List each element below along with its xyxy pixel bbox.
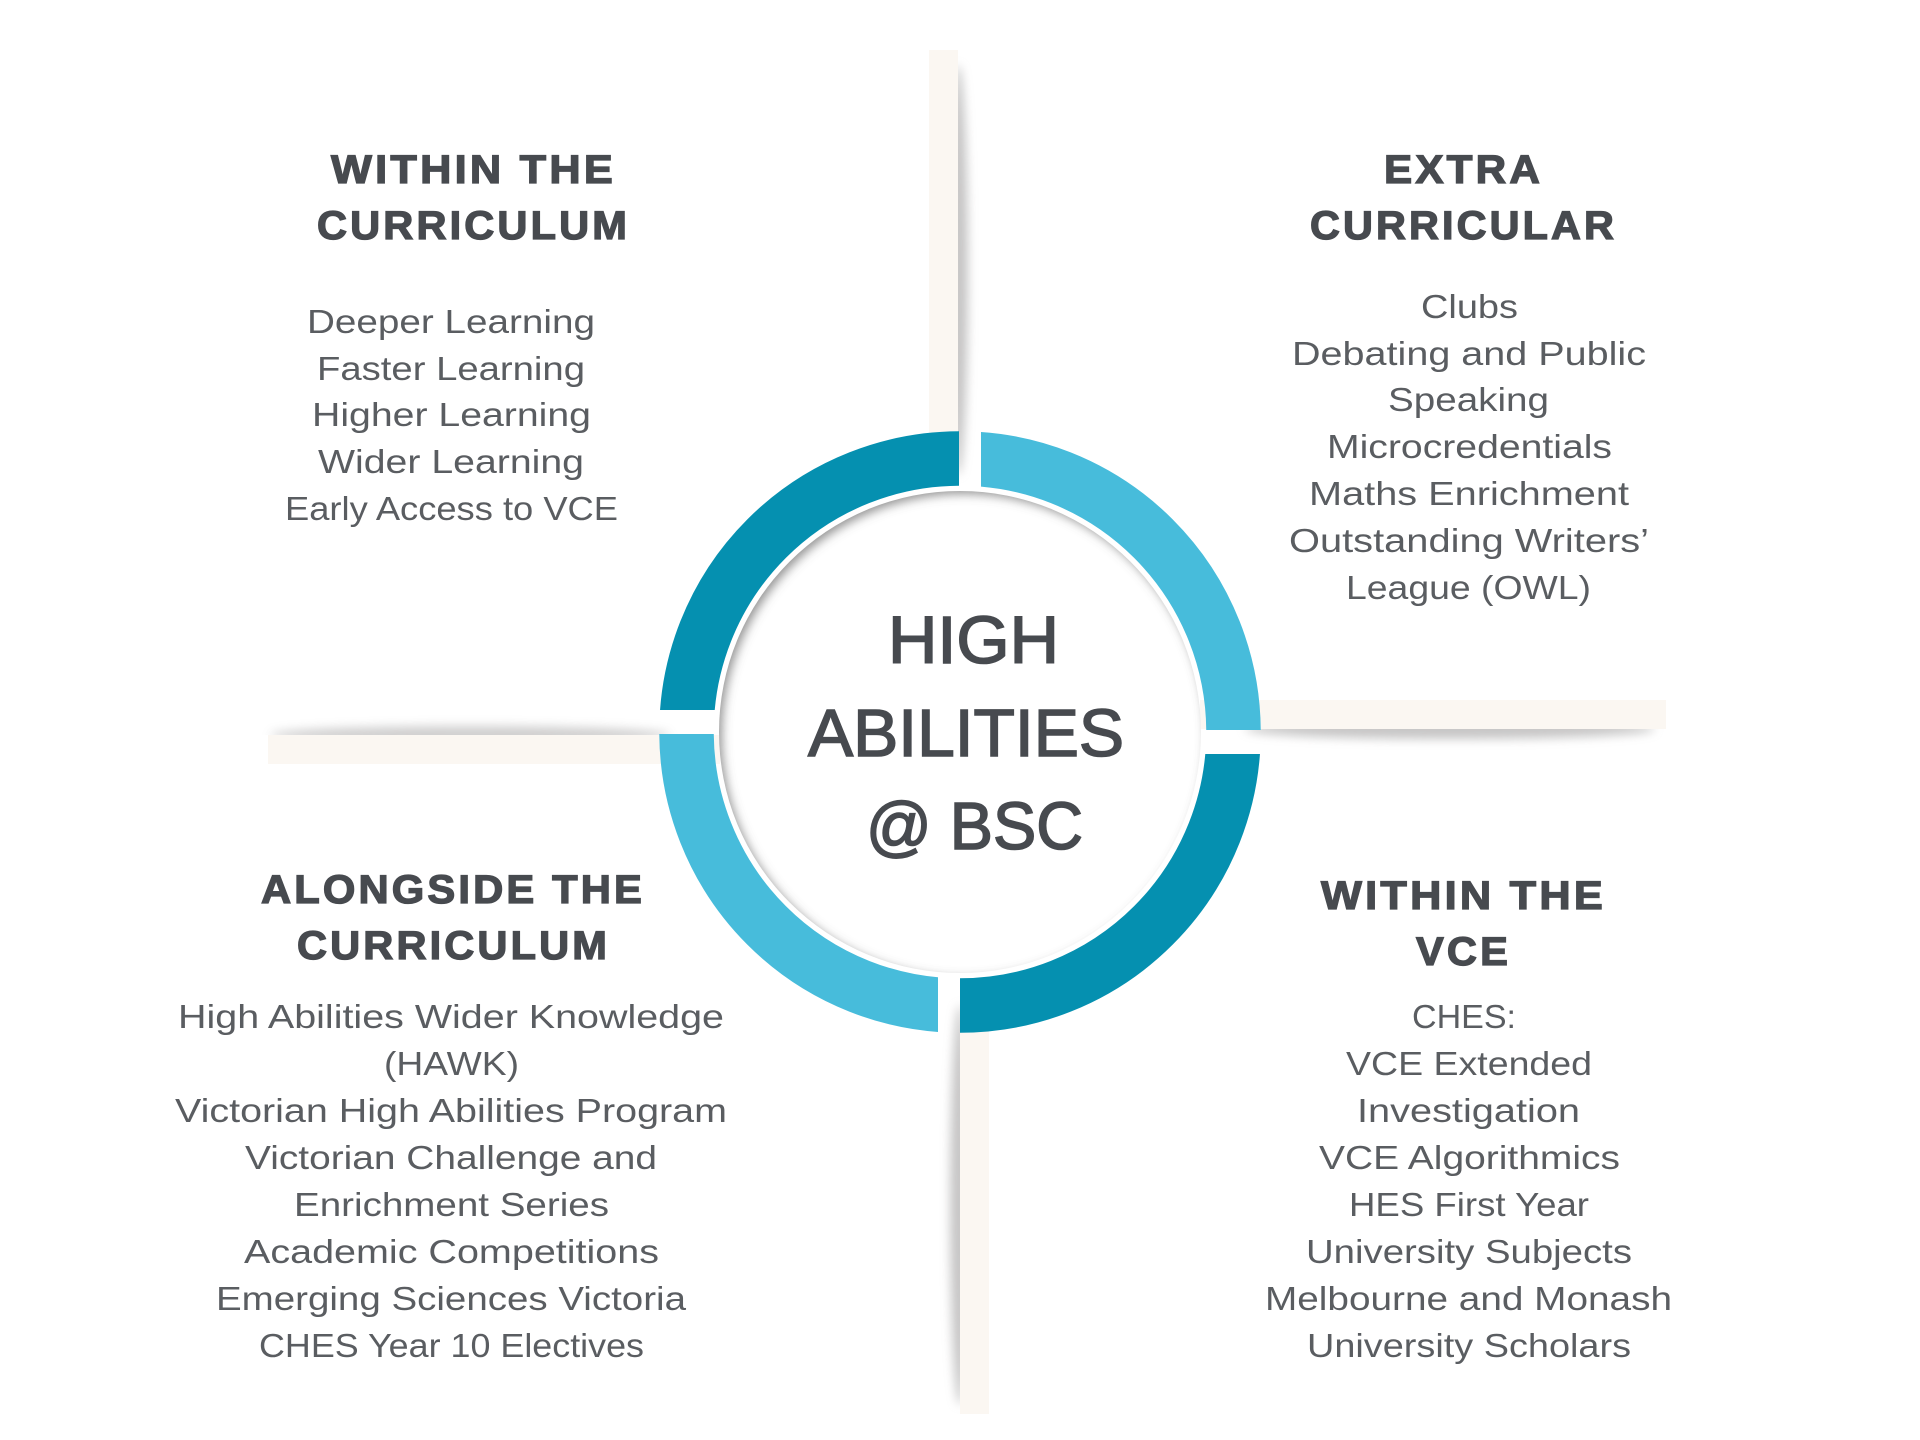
list: alongside the curriculum: Academic Competitions (244, 1233, 659, 1270)
list: within the vce (1265, 998, 1672, 1364)
centre title: ABILITIES (808, 696, 1124, 771)
list: within the curriculum: Faster Learning (317, 350, 585, 387)
list: within the vce: VCE Extended (1346, 1045, 1592, 1082)
centre title (808, 603, 1124, 864)
heading: within the curriculum: CURRICULUM (317, 204, 630, 248)
list: extra curricular: Speaking (1388, 381, 1549, 418)
list: alongside the curriculum (175, 998, 727, 1364)
heading: within the vce: WITHIN THE (1321, 874, 1606, 918)
right bar with shadow (1200, 700, 1666, 739)
heading: alongside the curriculum: ALONGSIDE THE (261, 868, 645, 912)
list: within the vce: University Scholars (1307, 1327, 1631, 1364)
ring segment: bottom right (960, 754, 1260, 1033)
heading: alongside the curriculum: CURRICULUM (297, 924, 610, 968)
list: within the vce: HES First Year (1349, 1186, 1589, 1223)
list: extra curricular: Maths Enrichment (1309, 475, 1629, 512)
heading: within the vce (1321, 874, 1606, 974)
panel: alongside the curriculum (175, 868, 727, 1364)
ring segment: top right (981, 432, 1261, 730)
list: within the curriculum: Higher Learning (312, 396, 591, 433)
ring segment: top left (660, 431, 959, 710)
list: alongside the curriculum: Victorian Challenge and (245, 1139, 657, 1176)
left bar with shadow (268, 726, 720, 764)
list: alongside the curriculum: Emerging Sciences Victoria (216, 1280, 687, 1317)
panel: within the vce (1265, 874, 1672, 1364)
top bar with shadow (929, 50, 968, 475)
bottom bar with shadow (950, 978, 989, 1414)
centre title: @ BSC (866, 789, 1083, 864)
list: extra curricular: Clubs (1421, 288, 1518, 325)
heading: within the vce: VCE (1416, 930, 1511, 974)
heading: within the curriculum (317, 148, 630, 248)
list: alongside the curriculum: High Abilities Wider Knowledge (178, 998, 724, 1035)
list: within the vce: CHES: (1412, 998, 1516, 1035)
list: within the vce: Investigation (1357, 1092, 1580, 1129)
list: extra curricular: Debating and Public (1292, 335, 1646, 372)
centre disk with inner shadow (712, 484, 1216, 988)
centre title: HIGH (888, 603, 1059, 678)
panel: within the curriculum (285, 148, 630, 527)
list: alongside the curriculum: (HAWK) (384, 1045, 519, 1082)
list: alongside the curriculum: Victorian High Abilities Program (175, 1092, 727, 1129)
heading: alongside the curriculum (261, 868, 645, 968)
list: extra curricular: League (OWL) (1346, 569, 1591, 606)
list: extra curricular (1289, 288, 1649, 606)
heading: extra curricular (1310, 148, 1617, 248)
list: within the curriculum: Wider Learning (318, 443, 584, 480)
heading: extra curricular: CURRICULAR (1310, 204, 1617, 248)
list: within the vce: University Subjects (1306, 1233, 1632, 1270)
list: alongside the curriculum: Enrichment Series (294, 1186, 609, 1223)
list: extra curricular: Outstanding Writers’ (1289, 522, 1649, 559)
list: within the vce: VCE Algorithmics (1319, 1139, 1620, 1176)
panel: extra curricular (1289, 148, 1649, 606)
list: within the curriculum: Deeper Learning (307, 303, 595, 340)
list: alongside the curriculum: CHES Year 10 Electives (259, 1327, 644, 1364)
list: within the curriculum: Early Access to VCE (285, 490, 618, 527)
heading: extra curricular: EXTRA (1384, 148, 1543, 192)
heading: within the curriculum: WITHIN THE (331, 148, 616, 192)
list: within the vce: Melbourne and Monash (1265, 1280, 1672, 1317)
ring segment: bottom left (659, 734, 938, 1032)
list: within the curriculum (285, 303, 618, 527)
list: extra curricular: Microcredentials (1327, 428, 1612, 465)
